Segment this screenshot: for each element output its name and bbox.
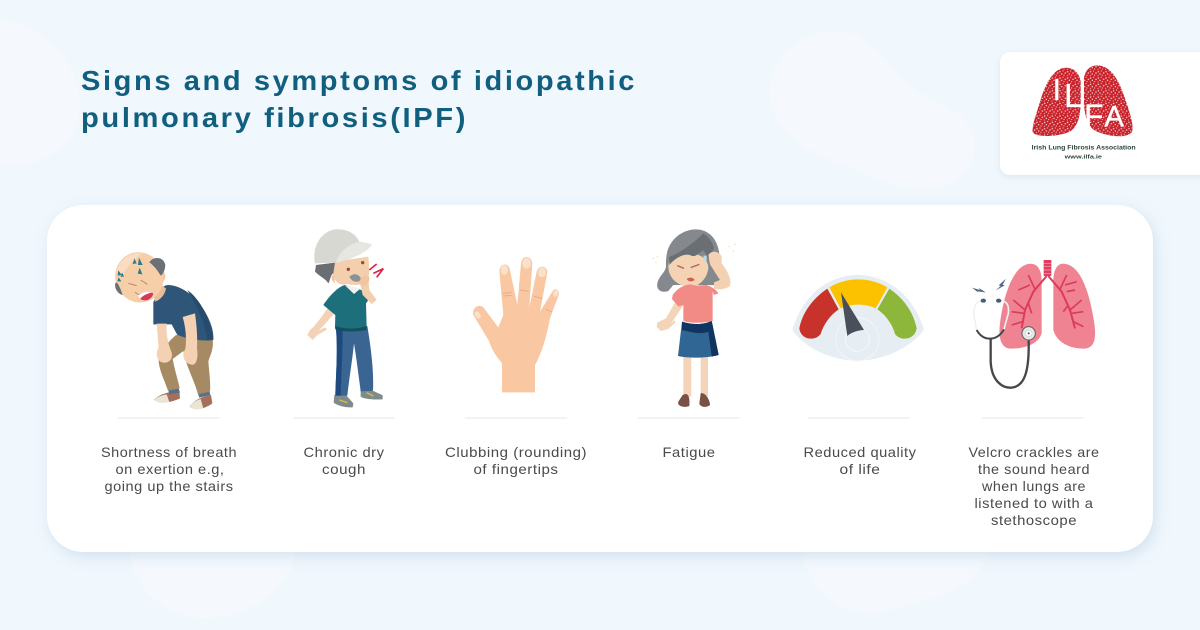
symptom 6: velcro crackles — [968, 260, 1100, 528]
icon: coughing man — [307, 229, 383, 407]
logo: ILFA lungs: A — [1104, 101, 1124, 134]
symptom 4: fatigue — [638, 229, 740, 460]
caption: Fatigue — [662, 444, 716, 460]
symptom 2: chronic dry cough — [293, 229, 395, 477]
caption — [445, 444, 587, 477]
divider — [465, 417, 567, 419]
divider — [808, 417, 910, 419]
symptom 1: shortness of breath — [101, 245, 237, 494]
divider — [982, 417, 1084, 419]
caption: Clubbing (rounding) — [445, 444, 587, 460]
caption: the sound heard — [978, 461, 1090, 477]
caption: stethoscope — [991, 512, 1077, 528]
divider — [638, 417, 740, 419]
caption: when lungs are — [981, 478, 1086, 494]
logo: ILFA lungs: F — [1084, 98, 1104, 134]
icon: out of breath man — [108, 245, 213, 409]
caption: of fingertips — [474, 461, 558, 477]
caption: Velcro crackles are — [968, 444, 1100, 460]
woman head and torso — [653, 229, 736, 331]
caption — [968, 444, 1100, 528]
title — [81, 65, 637, 133]
caption: of life — [840, 461, 880, 477]
icon: gauge — [792, 275, 924, 361]
caption: on exertion e.g, — [116, 461, 224, 477]
logo: ILFA lungs: Irish Lung Fibrosis Association — [1032, 144, 1136, 151]
icon: tired woman — [653, 229, 736, 407]
caption — [804, 444, 916, 477]
icon: hand — [473, 257, 559, 392]
caption: listened to with a — [974, 495, 1094, 511]
title: pulmonary fibrosis(IPF) — [81, 102, 468, 133]
logo card — [1000, 52, 1200, 175]
divider — [293, 417, 395, 419]
symptom 3: clubbing of fingertips — [445, 257, 587, 477]
icon: lungs and stethoscope — [972, 260, 1095, 388]
caption — [304, 444, 384, 477]
logo: ILFA lungs: L — [1064, 78, 1083, 115]
caption: cough — [322, 461, 366, 477]
caption: going up the stairs — [104, 478, 234, 494]
logo: ILFA lungs: www.ilfa.ie — [1063, 155, 1102, 161]
woman legs and skirt — [678, 321, 719, 407]
background blobs — [0, 20, 990, 618]
logo: ILFA lungs — [1032, 65, 1136, 161]
caption — [101, 444, 237, 494]
symptom 5: reduced quality of life — [792, 275, 924, 477]
panel: symptoms card — [47, 205, 1153, 552]
caption: Shortness of breath — [101, 444, 237, 460]
caption: Reduced quality — [804, 444, 916, 460]
logo: ILFA lungs: I — [1053, 73, 1061, 107]
title: Signs and symptoms of idiopathic — [81, 65, 637, 96]
divider — [118, 417, 220, 419]
caption: Chronic dry — [304, 444, 384, 460]
